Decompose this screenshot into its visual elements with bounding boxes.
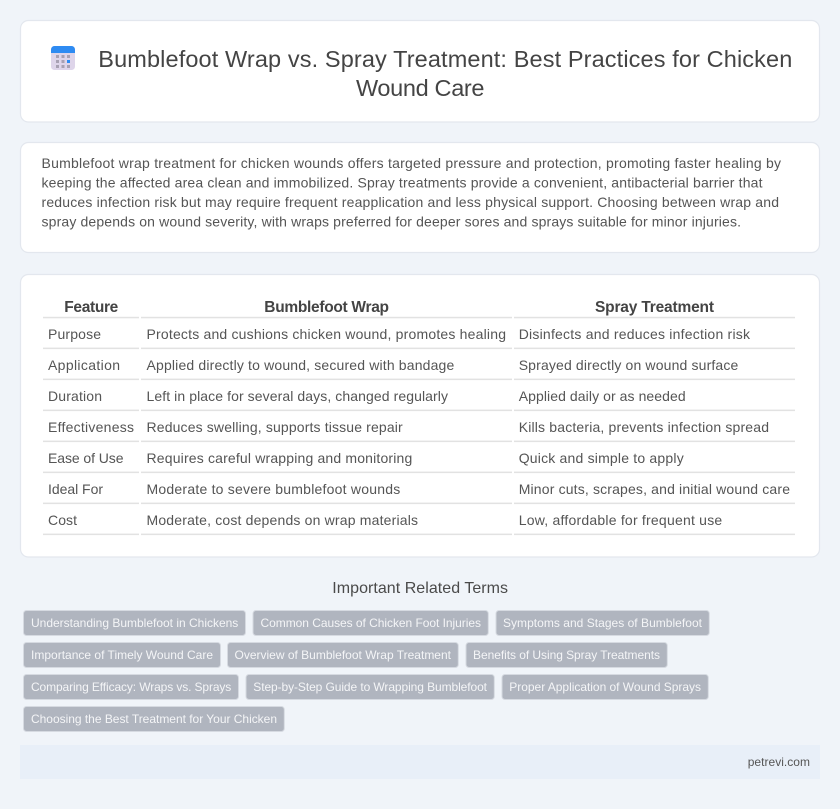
table row: ease of use: Requires careful wrapping and monitoring xyxy=(146,450,412,466)
table header row: Bumblefoot Wrap xyxy=(264,299,389,316)
title: Bumblefoot Wrap vs. Spray Treatment: Best Practices for Chicken xyxy=(98,46,792,72)
table row: purpose xyxy=(43,326,795,349)
footer source: petrevi.com xyxy=(748,755,810,769)
tag: wound sprays: Proper Application of Wound Sprays xyxy=(509,680,701,694)
table header row: Feature xyxy=(64,299,119,316)
tag: symptoms and stages xyxy=(496,610,709,636)
tag: spray benefits xyxy=(466,642,667,668)
tag: choosing treatment: Choosing the Best Treatment for Your Chicken xyxy=(31,712,277,726)
panel: comparison table xyxy=(20,274,820,557)
tag: comparing efficacy: Comparing Efficacy: Wraps vs. Sprays xyxy=(31,680,231,694)
tag: timely wound care xyxy=(24,642,220,668)
title: Wound Care xyxy=(356,75,484,101)
table row: cost xyxy=(43,512,795,535)
text block: summary paragraph xyxy=(42,155,781,230)
table row: cost: Low, affordable for frequent use xyxy=(519,512,722,528)
table row: effectiveness xyxy=(43,419,795,442)
tag: wrap overview: Overview of Bumblefoot Wrap Treatment xyxy=(234,648,452,662)
table row: effectiveness: Reduces swelling, supports tissue repair xyxy=(146,419,403,435)
table row: duration xyxy=(43,388,795,411)
text block: summary paragraph: reduces infection risk but may require frequent reapplication and less physical support. Choosing between wrap and xyxy=(42,194,779,210)
table row: ease of use xyxy=(43,450,795,473)
table row: duration: Left in place for several days, changed regularly xyxy=(146,388,448,404)
table row: ideal for: Minor cuts, scrapes, and initial wound care xyxy=(519,481,790,497)
tag: comparing efficacy xyxy=(24,674,238,700)
tag: spray benefits: Benefits of Using Spray Treatments xyxy=(473,648,660,662)
table row: effectiveness: Kills bacteria, prevents infection spread xyxy=(519,419,769,435)
table row: application: Applied directly to wound, secured with bandage xyxy=(146,357,455,373)
table row: purpose: Purpose xyxy=(48,326,101,342)
tag: common causes: Common Causes of Chicken Foot Injuries xyxy=(260,616,481,630)
table row: application: Sprayed directly on wound surface xyxy=(519,357,739,373)
table row: ideal for: Moderate to severe bumblefoot wounds xyxy=(146,481,400,497)
icon: calendar xyxy=(51,46,75,70)
tag: understanding bumblefoot: Understanding Bumblefoot in Chickens xyxy=(31,616,238,630)
tag: wrap overview xyxy=(228,642,458,668)
table row: ease of use: Ease of Use xyxy=(48,450,124,466)
panel: header xyxy=(20,20,820,122)
table row: duration: Applied daily or as needed xyxy=(519,388,686,404)
text block: summary paragraph: Bumblefoot wrap treatment for chicken wounds offers targeted pressure and protection, promoting faster healing by xyxy=(42,155,781,171)
tag: timely wound care: Importance of Timely Wound Care xyxy=(31,648,213,662)
table row: cost: Cost xyxy=(48,512,77,528)
text block: summary paragraph: spray depends on wound severity, with wraps preferred for deeper sores and sprays suitable for minor injuries. xyxy=(42,214,741,230)
table row: purpose: Disinfects and reduces infection risk xyxy=(519,326,751,342)
heading: important related terms: Important Related Terms xyxy=(332,580,508,597)
panel: summary xyxy=(20,142,820,252)
tag: common causes xyxy=(253,610,488,636)
table row: effectiveness: Effectiveness xyxy=(48,419,134,435)
table row: cost: Moderate, cost depends on wrap materials xyxy=(146,512,418,528)
table row: purpose: Protects and cushions chicken wound, promotes healing xyxy=(146,326,506,342)
tag: wrapping guide: Step-by-Step Guide to Wrapping Bumblefoot xyxy=(253,680,488,694)
table header row: Spray Treatment xyxy=(595,299,714,316)
table row: application: Application xyxy=(48,357,120,373)
footer bar xyxy=(20,745,820,779)
text block: summary paragraph: keeping the affected area clean and immobilized. Spray treatments provide a convenient, antibacterial barrier that xyxy=(42,174,763,190)
table row: duration: Duration xyxy=(48,388,102,404)
tag: choosing treatment xyxy=(24,706,284,732)
related term tags xyxy=(24,610,709,732)
table row: ideal for xyxy=(43,481,795,504)
table row: application xyxy=(43,357,795,380)
tag: wound sprays xyxy=(502,674,708,700)
table row: ease of use: Quick and simple to apply xyxy=(519,450,684,466)
tag: wrapping guide xyxy=(246,674,494,700)
tag: symptoms and stages: Symptoms and Stages of Bumblefoot xyxy=(503,616,703,630)
table row: ideal for: Ideal For xyxy=(48,481,103,497)
tag: understanding bumblefoot xyxy=(24,610,246,636)
title xyxy=(98,46,792,101)
table header row xyxy=(43,299,795,318)
